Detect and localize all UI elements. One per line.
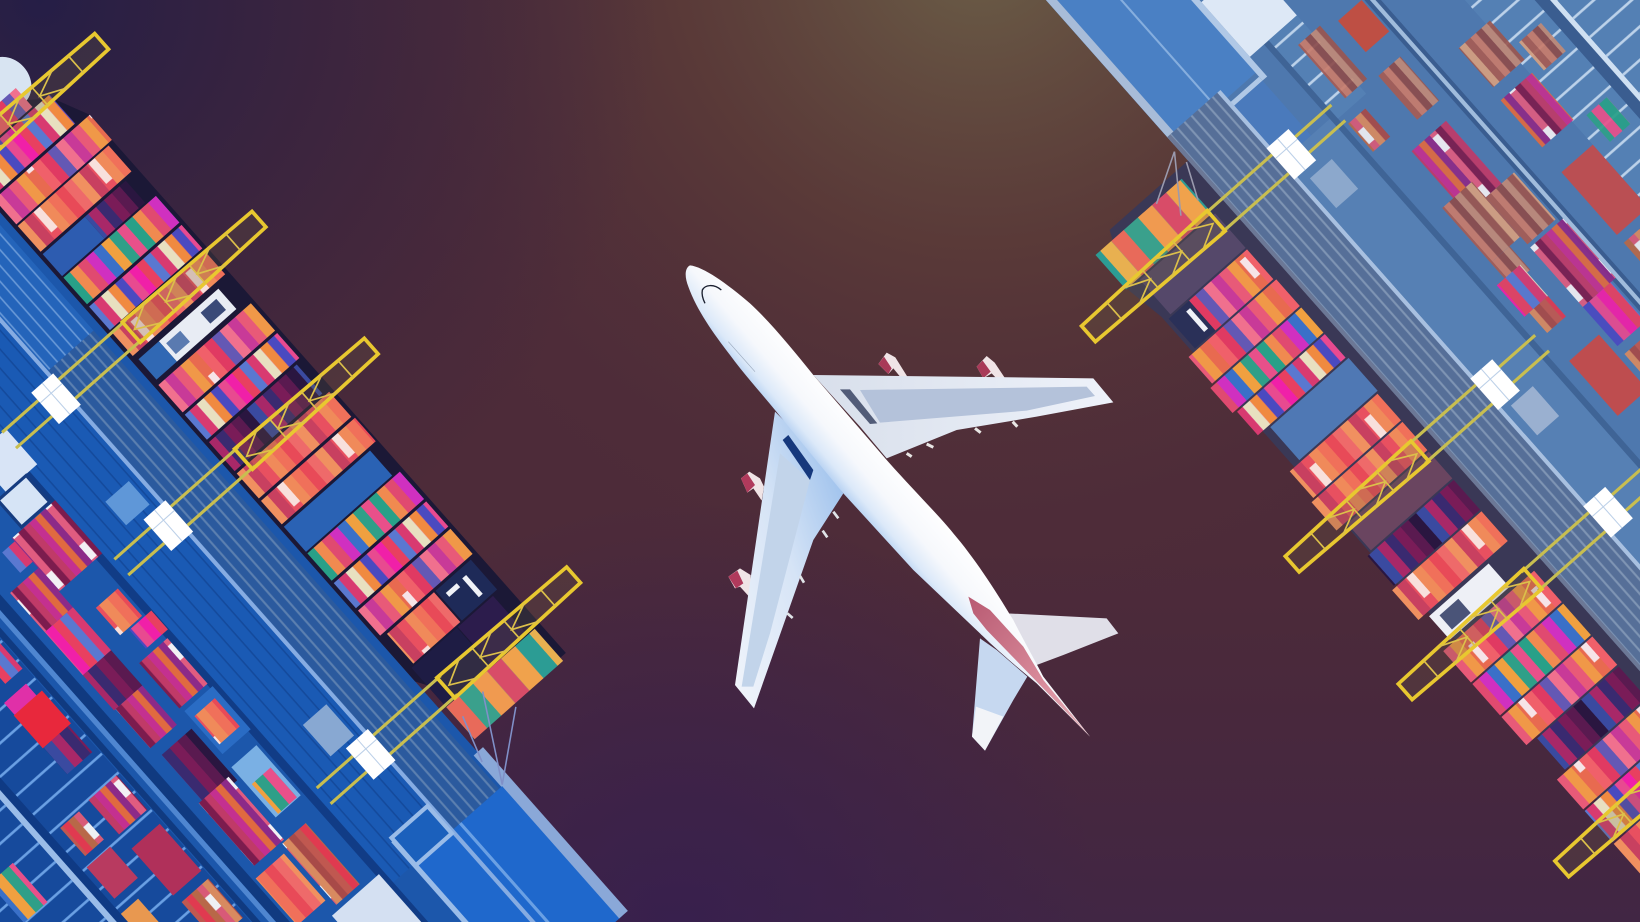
lower wing <box>735 412 843 708</box>
right ship stay wires <box>1138 150 1211 223</box>
engines on upper wing <box>878 353 1005 379</box>
left ship bow <box>0 47 42 118</box>
cockpit windshield <box>702 286 721 303</box>
engines on lower wing <box>728 472 764 598</box>
right container ship <box>1088 161 1640 903</box>
right port terminal <box>876 0 1640 922</box>
right yard containers <box>1287 0 1640 434</box>
right tailplane <box>1007 613 1118 665</box>
tail tip highlight <box>972 707 1003 751</box>
left ship stay wires <box>447 682 548 785</box>
right dock ground <box>1018 0 1640 922</box>
left container ship <box>0 35 569 743</box>
upper wing <box>813 375 1113 458</box>
left port terminal <box>0 0 764 922</box>
tail fin <box>968 597 1090 737</box>
fuselage window line <box>728 342 755 372</box>
airplane <box>686 265 1118 751</box>
fuselage <box>686 265 1090 737</box>
right quay cranes <box>1075 97 1640 884</box>
left tailplane <box>972 638 1027 751</box>
left yard containers <box>0 472 379 922</box>
left dock ground <box>0 97 628 922</box>
left quay cranes <box>0 26 587 812</box>
